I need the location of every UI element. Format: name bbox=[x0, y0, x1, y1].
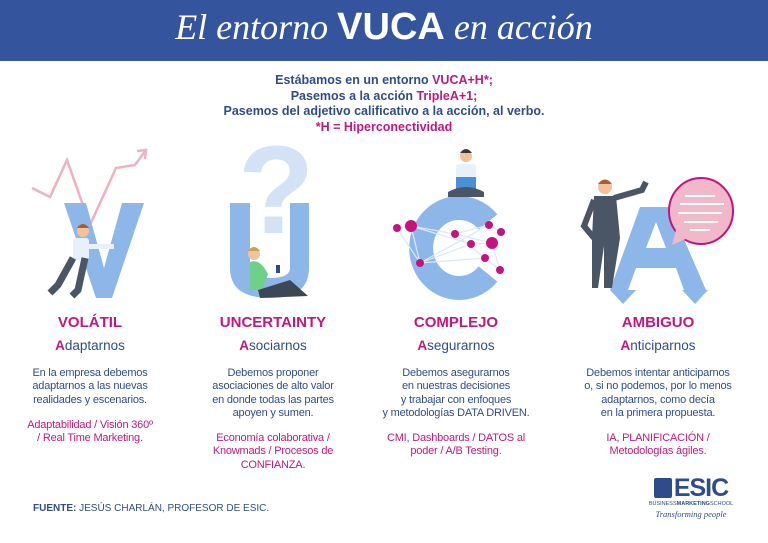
column: ambiguo: en la primera propuesta. bbox=[601, 407, 715, 419]
illustration U: ? bbox=[238, 121, 314, 260]
column: ambiguo: IA, PLANIFICACIÓN / bbox=[606, 432, 710, 444]
logo ESIC: ESIC bbox=[674, 474, 728, 502]
column: ambiguo: adaptarnos, como decía bbox=[601, 394, 715, 406]
column: complejo: Asegurarnos bbox=[417, 338, 495, 353]
header band bbox=[0, 0, 768, 61]
column: ambiguo: Anticiparnos bbox=[620, 338, 696, 353]
column: uncertainty: CONFIANZA. bbox=[241, 459, 305, 471]
column: complejo: en nuestras decisiones bbox=[402, 380, 510, 392]
logo ESIC: BUSINESSMARKETINGSCHOOL bbox=[649, 501, 733, 507]
intro text: Pasemos del adjetivo calificativo a la acción, al verbo. bbox=[224, 104, 544, 118]
column: volátil: / Real Time Marketing. bbox=[37, 432, 143, 444]
column: volátil bbox=[27, 314, 153, 444]
column: complejo: Debemos asegurarnos bbox=[402, 367, 510, 379]
column: ambiguo bbox=[584, 314, 732, 457]
column: ambiguo: o, si no podemos, por lo menos bbox=[584, 380, 732, 392]
column: uncertainty: apoyen y sumen. bbox=[233, 407, 313, 419]
source footer: FUENTE: JESÚS CHARLÁN, PROFESOR DE ESIC. bbox=[33, 503, 269, 514]
column: complejo bbox=[382, 314, 530, 457]
intro text bbox=[224, 73, 544, 134]
column: uncertainty bbox=[212, 314, 334, 471]
heading complejo: COMPLEJO bbox=[414, 314, 498, 331]
intro text: Estábamos en un entorno VUCA+H*; bbox=[275, 73, 493, 87]
column: uncertainty: asociaciones de alto valor bbox=[212, 380, 334, 392]
logo ESIC: Transforming people bbox=[655, 509, 727, 519]
illustration C bbox=[393, 149, 505, 288]
column: uncertainty: Knowmads / Procesos de bbox=[213, 445, 333, 457]
column: volátil: realidades y escenarios. bbox=[33, 394, 147, 406]
column: ambiguo: Metodologías ágiles. bbox=[610, 445, 706, 457]
illustration A bbox=[584, 178, 733, 304]
column: volátil: Adaptarnos bbox=[55, 338, 125, 353]
column: uncertainty: Debemos proponer bbox=[228, 367, 318, 379]
illustration V bbox=[32, 150, 146, 298]
column: complejo: CMI, Dashboards / DATOS al bbox=[387, 432, 525, 444]
heading volátil: VOLÁTIL bbox=[58, 314, 122, 331]
intro text: *H = Hiperconectividad bbox=[316, 120, 452, 134]
intro text: Pasemos a la acción TripleA+1; bbox=[291, 88, 477, 102]
heading ambiguo: AMBIGUO bbox=[622, 314, 694, 331]
column: volátil: Adaptabilidad / Visión 360º bbox=[27, 419, 153, 431]
column: uncertainty: Economía colaborativa / bbox=[216, 432, 330, 444]
logo ESIC bbox=[649, 474, 733, 519]
column: complejo: poder / A/B Testing. bbox=[410, 445, 502, 457]
column: complejo: y metodologías DATA DRIVEN. bbox=[382, 407, 530, 419]
column: uncertainty: en donde todas las partes bbox=[212, 394, 334, 406]
column: complejo: y trabajar con enfoques bbox=[401, 394, 511, 406]
heading uncertainty: UNCERTAINTY bbox=[220, 314, 326, 331]
column: volátil: adaptarnos a las nuevas bbox=[32, 380, 148, 392]
title: El entorno VUCA en acción bbox=[175, 6, 593, 48]
column: uncertainty: Asociarnos bbox=[239, 338, 307, 353]
column: ambiguo: Debemos intentar anticiparnos bbox=[586, 367, 730, 379]
column: volátil: En la empresa debemos bbox=[32, 367, 148, 379]
